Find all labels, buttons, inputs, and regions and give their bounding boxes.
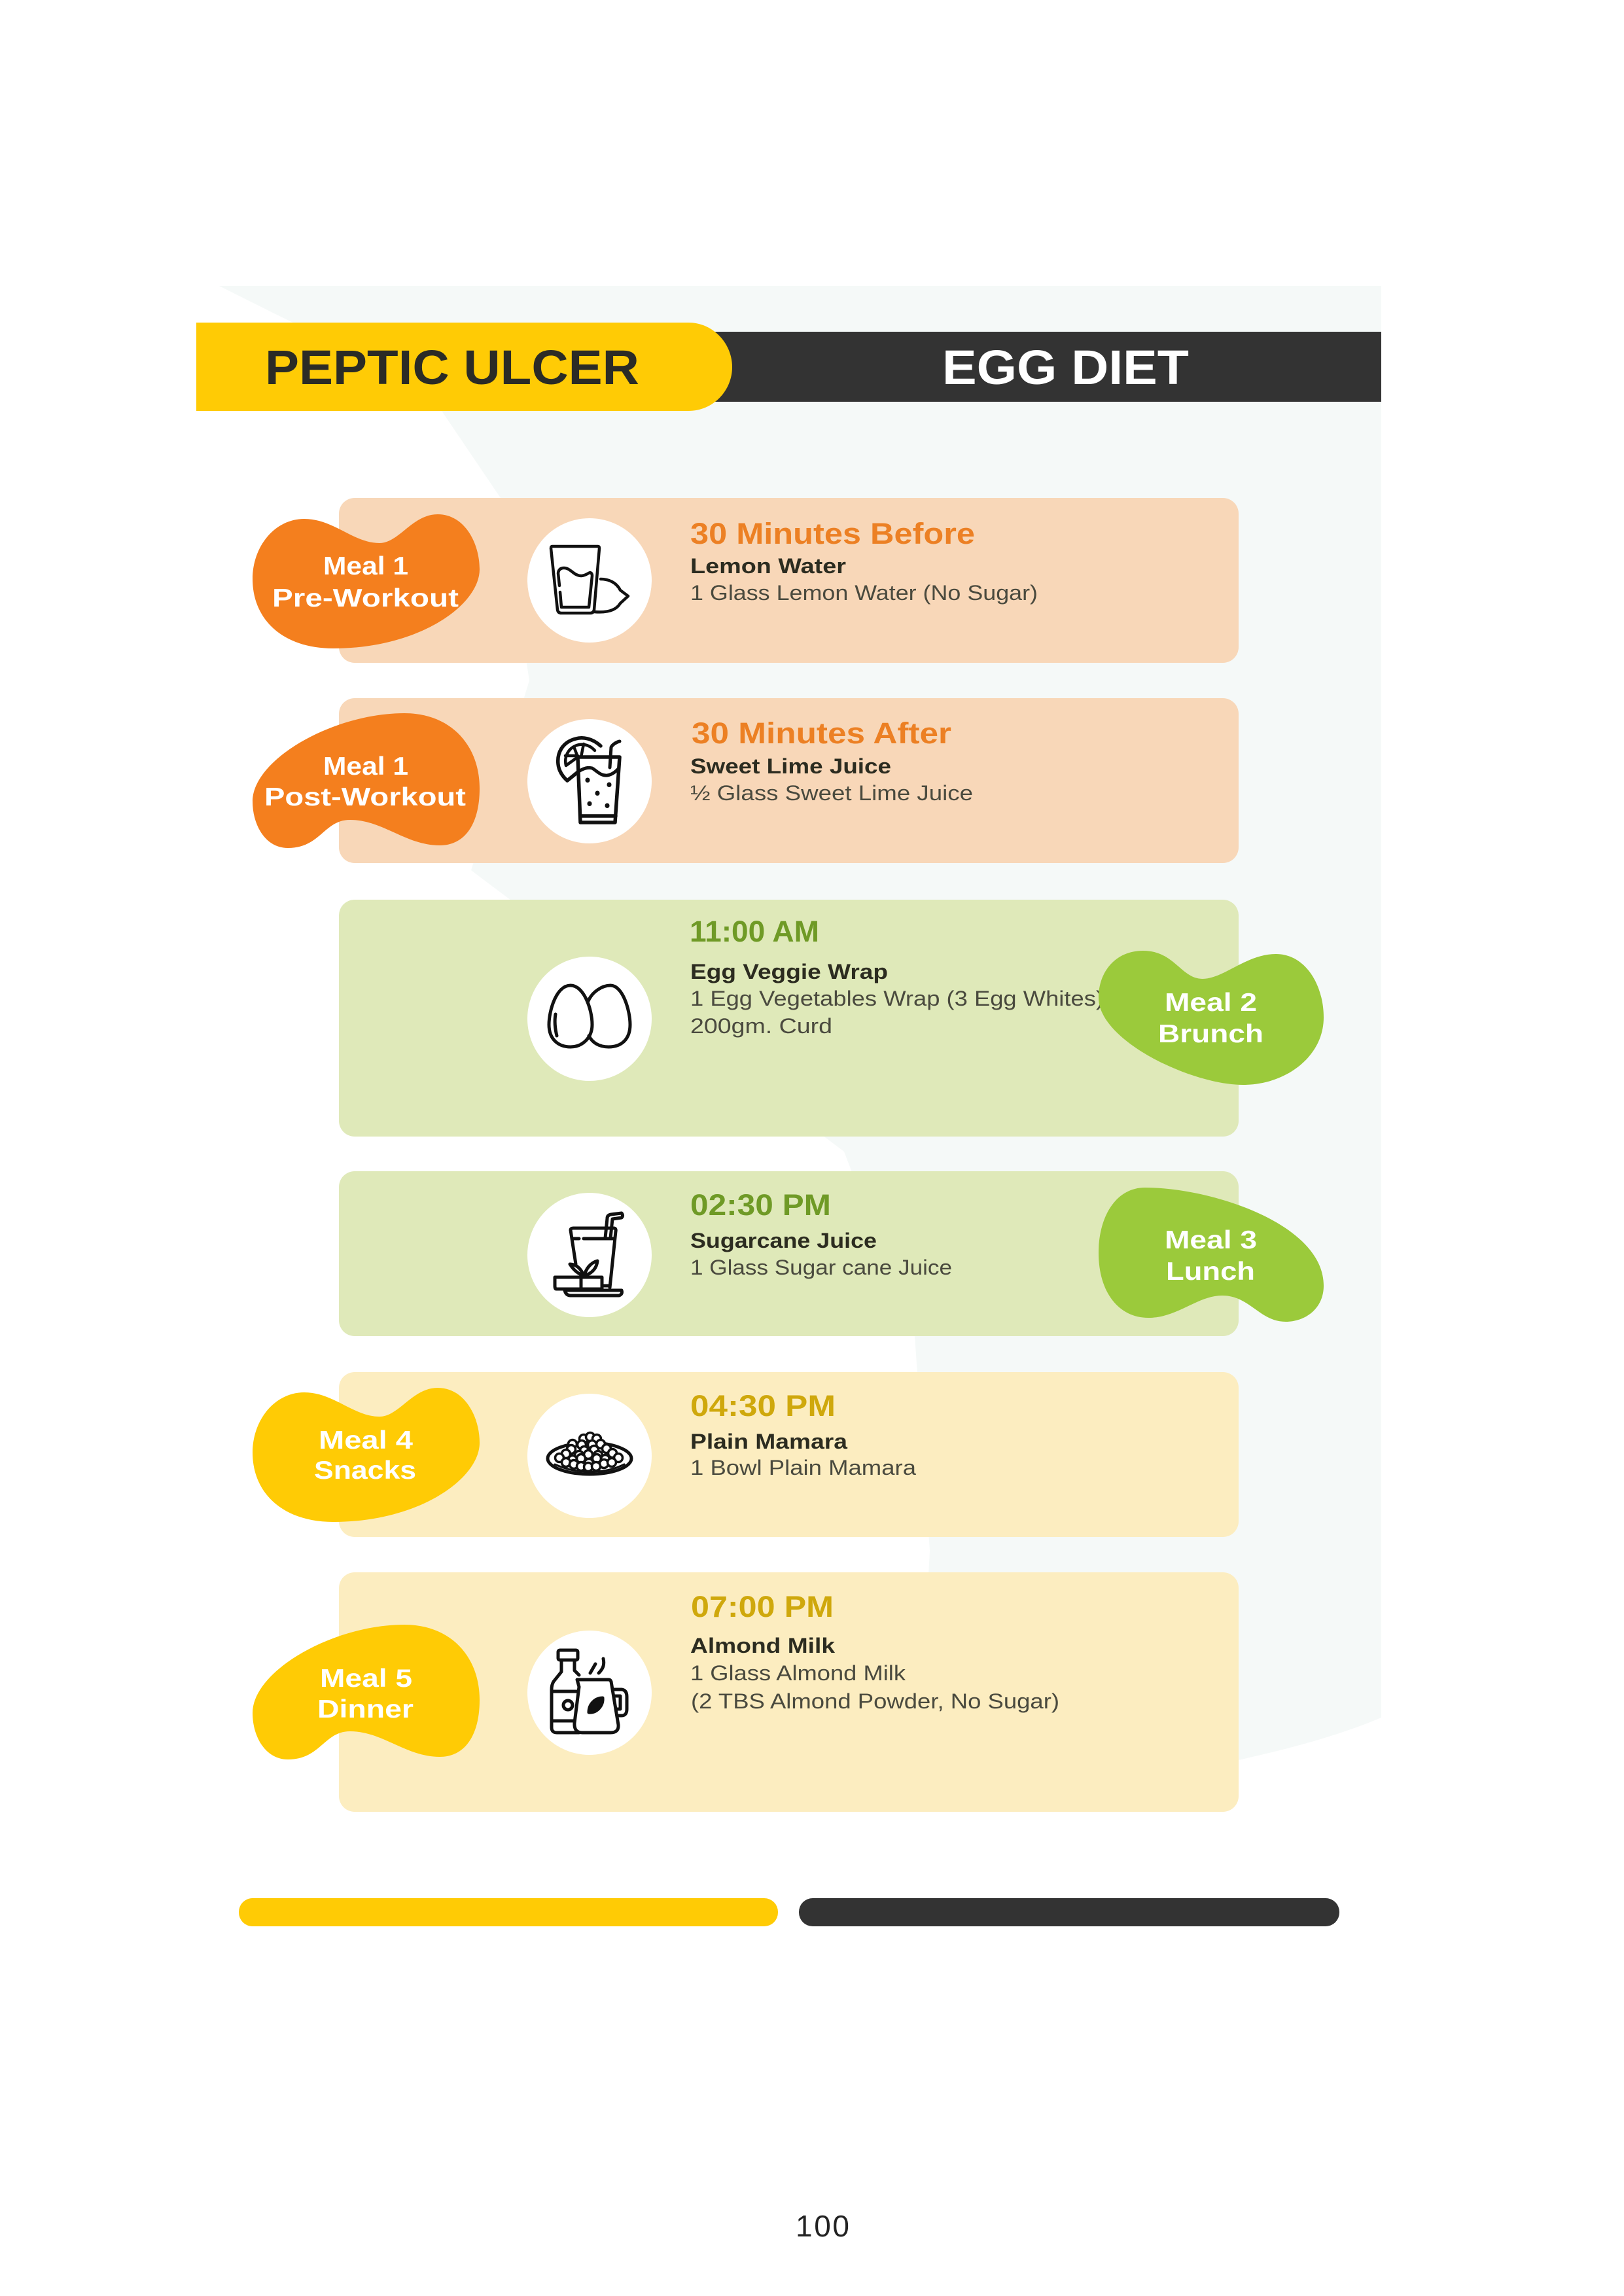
text: 11:00 am: 1 Egg Vegetables Wrap (3 Egg Whites) bbox=[690, 987, 1104, 1010]
text: 07:00 pm bbox=[690, 1590, 1059, 1713]
text: 04:30 pm bbox=[690, 1389, 916, 1479]
panel: meal 4 snacks bbox=[253, 1372, 1239, 1537]
title banner bbox=[196, 323, 1381, 411]
text: 07:00 pm: Almond Milk bbox=[690, 1634, 835, 1657]
text: 30 minutes before bbox=[690, 517, 1038, 605]
blob label bbox=[1099, 1188, 1324, 1322]
blob label bbox=[253, 713, 480, 848]
text: 02:30 pm: 1 Glass Sugar cane Juice bbox=[690, 1256, 952, 1279]
text: 30 minutes before: Lemon Water bbox=[690, 554, 846, 578]
blob label: Meal 1 bbox=[323, 752, 408, 781]
text: 11:00 am: 200gm. Curd bbox=[690, 1014, 832, 1038]
blob label: Post-Workout bbox=[264, 783, 466, 811]
text: 02:30 pm: 02:30 PM bbox=[690, 1188, 831, 1222]
yellow banner bbox=[196, 323, 732, 411]
text: 04:30 pm: 1 Bowl Plain Mamara bbox=[690, 1456, 916, 1479]
text: 02:30 pm bbox=[690, 1188, 952, 1279]
blob label: Lunch bbox=[1166, 1258, 1255, 1286]
heading: peptic ulcer: PEPTIC ULCER bbox=[265, 340, 639, 395]
background panel bbox=[219, 286, 1381, 1806]
text: 30 minutes after: ½ Glass Sweet Lime Juice bbox=[690, 781, 973, 805]
panel: meal 3 lunch bbox=[339, 1171, 1324, 1336]
blob label: Meal 5 bbox=[320, 1665, 412, 1693]
panel: meal 5 dinner bbox=[253, 1572, 1239, 1812]
text: 30 minutes before: 30 Minutes Before bbox=[690, 517, 975, 550]
text: 30 minutes after: 30 Minutes After bbox=[692, 716, 951, 750]
text: 11:00 am: Egg Veggie Wrap bbox=[690, 960, 888, 983]
text: 11:00 am bbox=[690, 915, 1104, 1038]
panel: meal 1 pre-workout bbox=[253, 498, 1239, 663]
text: 30 minutes after: Sweet Lime Juice bbox=[690, 754, 891, 778]
panel: meal 2 brunch bbox=[339, 900, 1324, 1137]
icon: plain mamara bbox=[527, 1394, 652, 1518]
text: 07:00 pm: 07:00 PM bbox=[691, 1590, 834, 1623]
icon: sweet lime juice bbox=[527, 719, 652, 843]
blob label bbox=[253, 514, 480, 648]
panel: meal 1 post-workout bbox=[253, 698, 1239, 863]
text: 30 minutes after bbox=[690, 716, 973, 805]
footer bars bbox=[239, 1898, 1339, 1926]
icon: lemon water bbox=[527, 518, 652, 643]
text: 04:30 pm: Plain Mamara bbox=[690, 1430, 847, 1453]
text: 30 minutes before: 1 Glass Lemon Water (No Sugar) bbox=[690, 581, 1038, 605]
blob label: Brunch bbox=[1158, 1020, 1263, 1048]
blob label bbox=[1099, 951, 1324, 1085]
blob label bbox=[253, 1625, 480, 1759]
blob label: Meal 4 bbox=[319, 1426, 413, 1455]
blob label: Pre-Workout bbox=[272, 584, 459, 612]
page number: 100 bbox=[796, 2209, 849, 2243]
blob label: Meal 3 bbox=[1165, 1226, 1257, 1254]
blob label: Meal 2 bbox=[1165, 989, 1257, 1017]
text: 02:30 pm: Sugarcane Juice bbox=[690, 1229, 877, 1252]
blob label: Meal 1 bbox=[323, 552, 408, 580]
text: 11:00 am: 11:00 AM bbox=[690, 915, 819, 948]
text: 07:00 pm: (2 TBS Almond Powder, No Sugar) bbox=[691, 1689, 1059, 1713]
blob label: Dinner bbox=[317, 1695, 414, 1723]
icon: eggs bbox=[527, 957, 652, 1081]
blob label: Snacks bbox=[314, 1457, 416, 1485]
icon: almond milk bbox=[527, 1631, 652, 1755]
text: 07:00 pm: 1 Glass Almond Milk bbox=[690, 1661, 906, 1685]
heading: egg diet: EGG DIET bbox=[942, 340, 1189, 395]
blob label bbox=[253, 1388, 480, 1522]
dark bar bbox=[694, 332, 1381, 402]
icon: sugarcane juice bbox=[527, 1193, 652, 1317]
text: 04:30 pm: 04:30 PM bbox=[690, 1389, 836, 1422]
